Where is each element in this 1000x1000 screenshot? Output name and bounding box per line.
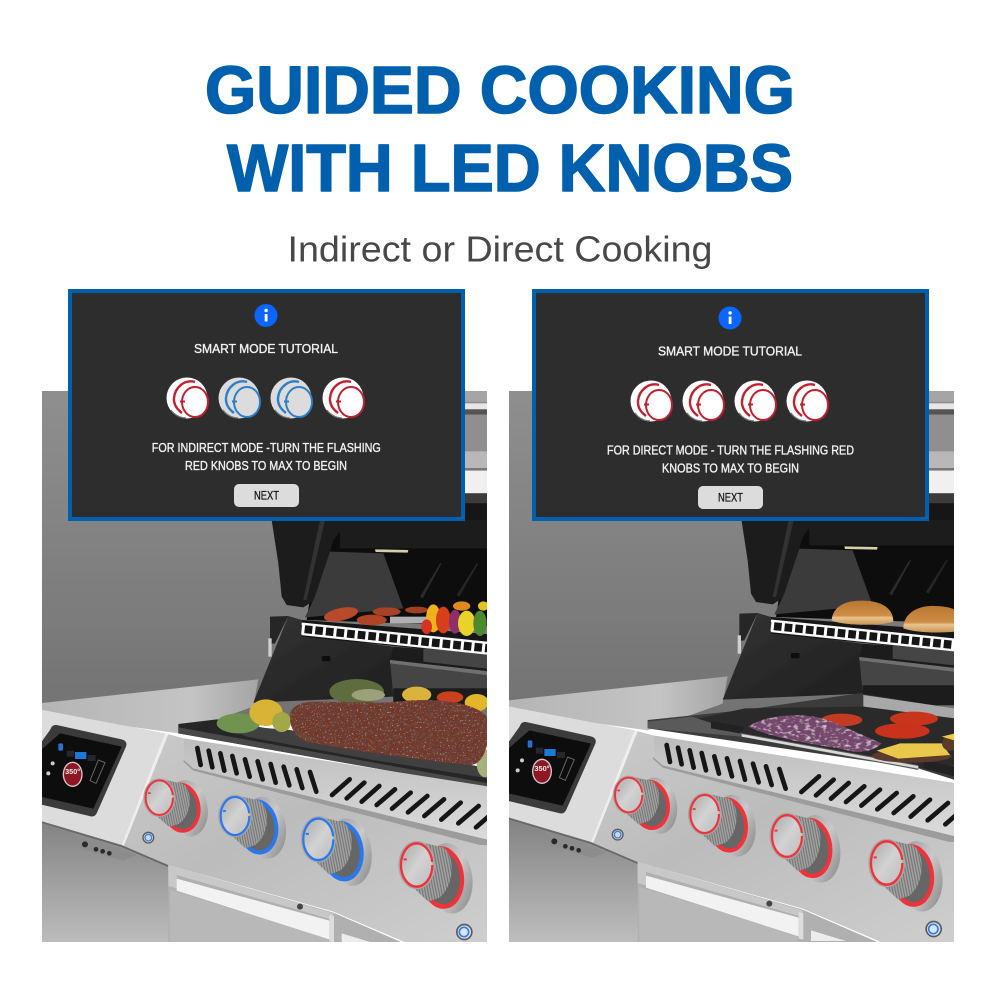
icon: info (718, 306, 742, 330)
icon: info (254, 304, 278, 327)
panel: direct mode tutorial (534, 291, 927, 519)
instruction text (607, 444, 854, 476)
button: next (698, 486, 763, 509)
background chrome stripes (929, 391, 954, 517)
instruction text: FOR INDIRECT MODE -TURN THE FLASHING (152, 441, 381, 455)
instruction text (152, 441, 381, 473)
grate and tray (178, 719, 488, 788)
instruction text: RED KNOBS TO MAX TO BEGIN (185, 459, 347, 473)
panel: indirect mode tutorial (70, 291, 463, 519)
subtitle: Indirect or Direct Cooking (288, 228, 712, 270)
food: rack skewers (323, 601, 489, 636)
food: griddle items (748, 712, 958, 763)
title (205, 53, 795, 206)
knob icons (166, 378, 364, 418)
instruction text: FOR DIRECT MODE - TURN THE FLASHING RED (607, 444, 854, 458)
title: GUIDED COOKING (205, 53, 795, 128)
knobs (612, 776, 678, 834)
background chrome stripes (465, 391, 487, 520)
photo: indirect cooking grill (33, 387, 500, 953)
knob icons (630, 380, 828, 422)
button: next: NEXT (254, 490, 279, 502)
instruction text: KNOBS TO MAX TO BEGIN (662, 462, 799, 476)
button: next: NEXT (718, 492, 743, 504)
food: roast (290, 700, 488, 765)
griddle surround (648, 693, 955, 780)
knobs (143, 778, 208, 836)
title: WITH LED KNOBS (227, 131, 793, 206)
panel heading: SMART MODE TUTORIAL (194, 341, 338, 356)
food: vegetables on grate (217, 679, 493, 777)
panel heading: SMART MODE TUTORIAL (658, 344, 802, 358)
photo: direct cooking grill (503, 384, 969, 950)
food: burger buns on rack (832, 601, 955, 633)
button: next (234, 484, 299, 507)
